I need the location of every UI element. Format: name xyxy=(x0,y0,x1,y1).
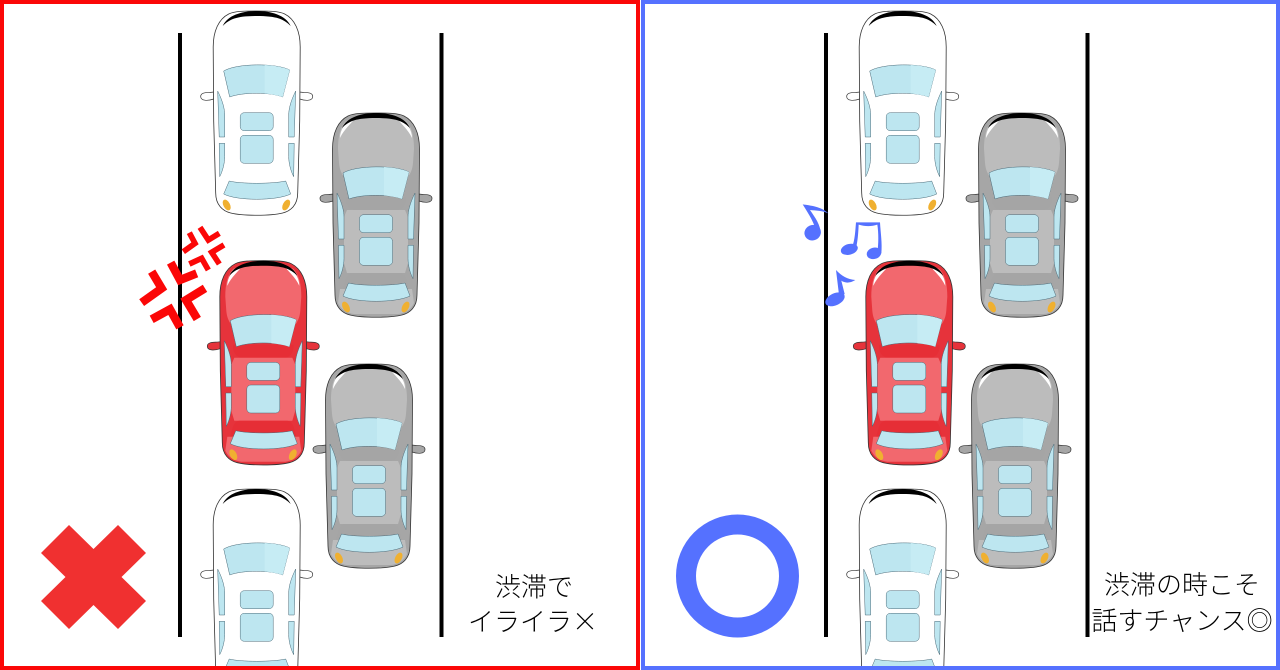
car: red xyxy=(207,261,319,465)
icon: blue circle xyxy=(686,524,789,628)
icon: music notes xyxy=(802,204,883,309)
road line left xyxy=(824,33,828,637)
car: white rear xyxy=(201,489,313,670)
car: white front xyxy=(847,11,959,215)
panel: bad example (left) xyxy=(41,11,598,670)
car: gray upper xyxy=(320,113,432,317)
frame: blue right border xyxy=(643,2,1278,668)
car: white front xyxy=(201,11,313,215)
caption: left: イライラ× xyxy=(468,602,598,639)
car: gray lower xyxy=(959,364,1071,568)
car: red xyxy=(853,261,965,465)
road line right xyxy=(1086,33,1090,637)
icon: red cross xyxy=(41,525,146,629)
car: gray lower xyxy=(313,364,425,568)
road line right xyxy=(440,33,444,637)
car: gray upper xyxy=(966,113,1078,317)
car: white rear xyxy=(847,489,959,670)
panel: good example (right) xyxy=(686,11,1273,670)
frame: red left border xyxy=(2,2,638,668)
road line left xyxy=(178,33,182,637)
caption: right: 話すチャンス◎ xyxy=(1091,606,1273,636)
caption: left: 渋滞で xyxy=(495,572,573,602)
icon: anger marks xyxy=(142,227,224,327)
caption: right: 渋滞の時こそ xyxy=(1104,570,1260,600)
